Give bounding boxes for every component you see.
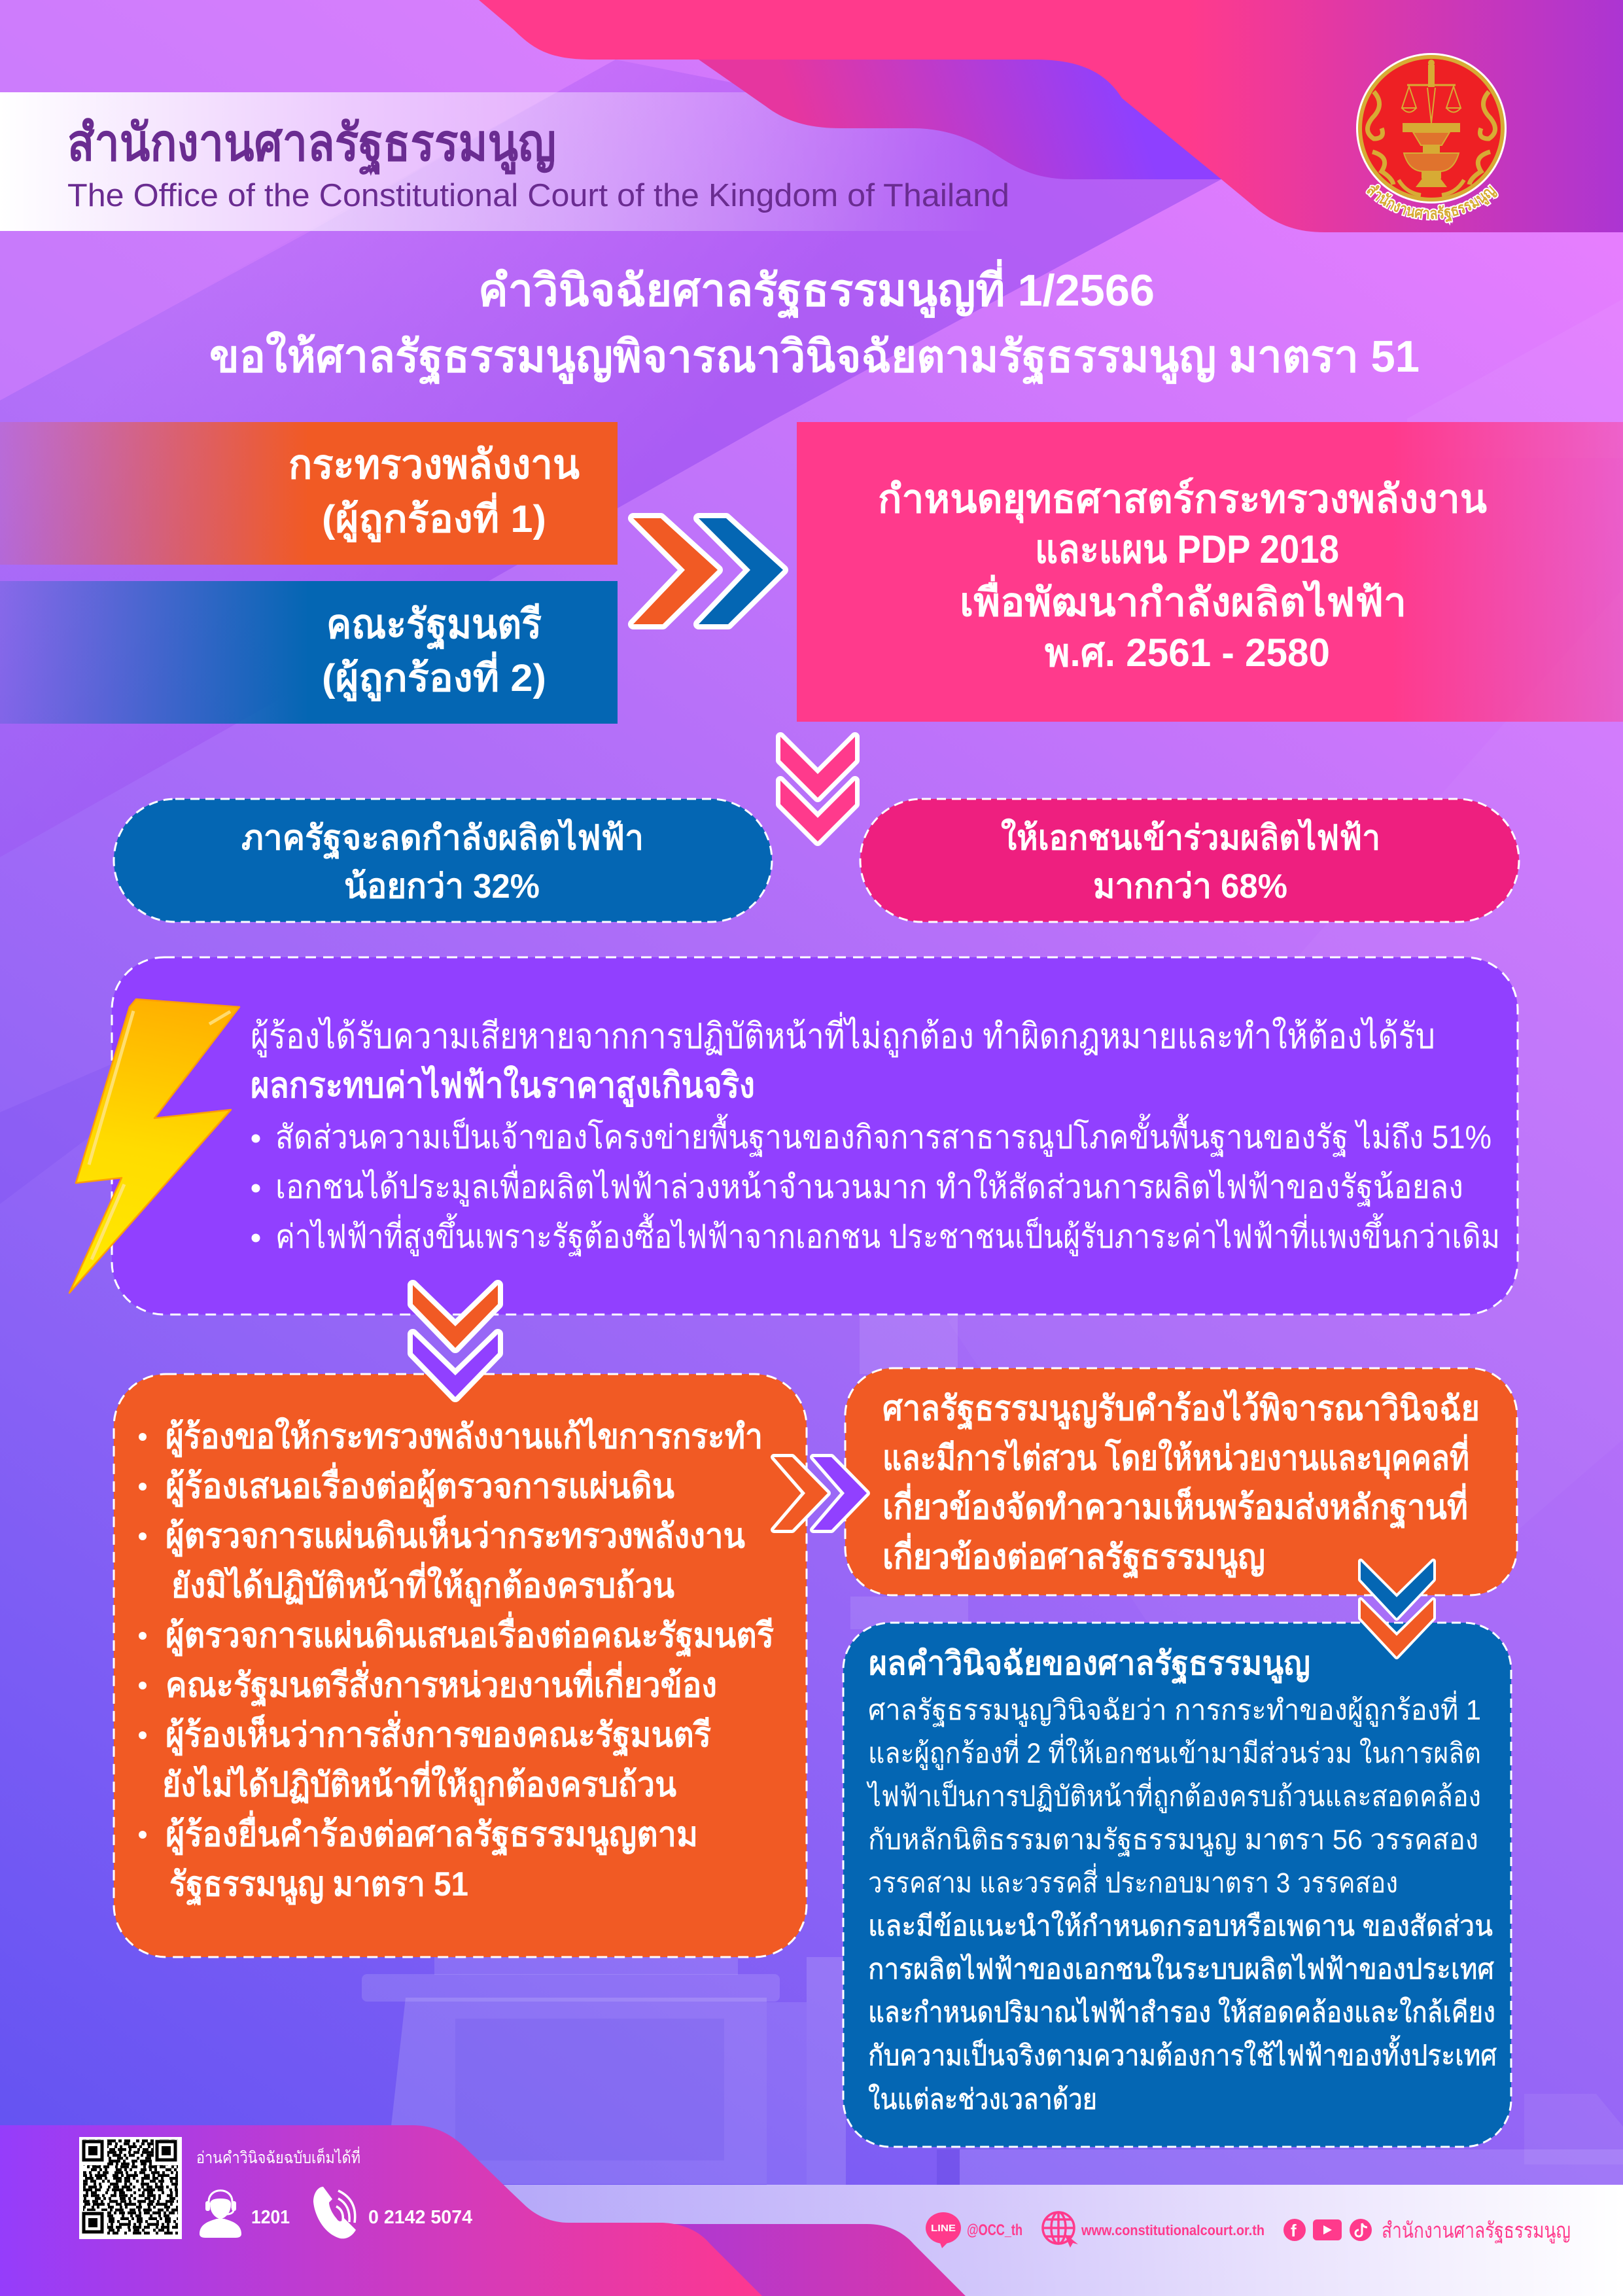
- footer shape: back: [589, 2224, 966, 2296]
- panel: court ruling: การผลิตไฟฟ้าของเอกชนในระบบผลิตไฟฟ้าของประเทศ: [868, 1953, 1494, 1985]
- pill: state under 32%: ภาครัฐจะลดกำลังผลิตไฟฟ้า: [241, 818, 644, 860]
- panel: petitioner damage: เอกชนได้ประมูลเพื่อผลิตไฟฟ้าล่วงหน้าจำนวนมาก ทำให้สัดส่วนการผลิตไฟฟ้าของรัฐน้อยลง: [275, 1165, 1463, 1207]
- panel: petitioner damage: สัดส่วนความเป็นเจ้าของโครงข่ายพื้นฐานของกิจการสาธารณูปโภคขั้นพื้นฐานของรัฐ ไม่ถึง 51%: [275, 1114, 1492, 1157]
- panel: court ruling: กับหลักนิติธรรมตามรัฐธรรมนูญ มาตรา 56 วรรคสอง: [868, 1824, 1478, 1857]
- panel: energy strategy: เพื่อพัฒนากำลังผลิตไฟฟ้า: [960, 574, 1406, 624]
- panel: petitioner actions: ผู้ร้องเสนอเรื่องต่อผู้ตรวจการแผ่นดิน: [166, 1462, 674, 1508]
- panel: court ruling: กับความเป็นจริงตามความต้องการใช้ไฟฟ้าของทั้งประเทศ: [868, 2035, 1497, 2072]
- panel: court accepts petition: ศาลรัฐธรรมนูญรับคำร้องไว้พิจารณาวินิจฉัย: [882, 1388, 1480, 1430]
- text: read full ruling: อ่านคำวินิจฉัยฉบับเต็มได้ที่: [196, 2146, 360, 2167]
- panel: respondent 2: [0, 581, 618, 724]
- arrow: small double chevron right between panels: [774, 1457, 867, 1530]
- panel: court accepts petition: เกี่ยวข้องจัดทำความเห็นพร้อมส่งหลักฐานที่: [882, 1483, 1468, 1529]
- main title: ขอให้ศาลรัฐธรรมนูญพิจารณาวินิจฉัยตามรัฐธรรมนูญ มาตรา 51: [209, 330, 1420, 385]
- pill: private over 68%: [860, 799, 1519, 922]
- icon: LINE: [926, 2212, 961, 2248]
- panel: court accepts petition: [845, 1368, 1517, 1595]
- panel: court accepts petition: เกี่ยวข้องต่อศาลรัฐธรรมนูญ: [882, 1533, 1265, 1579]
- panel: petitioner actions: ผู้ร้องยื่นคำร้องต่อศาลรัฐธรรมนูญตาม: [166, 1810, 698, 1856]
- text: website: www.constitutionalcourt.or.th: [1081, 2222, 1265, 2238]
- panel: respondent 1: [0, 422, 618, 565]
- pill: state under 32%: [114, 799, 772, 922]
- icon: phone: [313, 2187, 356, 2238]
- text: hotline 1201: 1201: [251, 2207, 290, 2228]
- header ribbon: back: [699, 60, 1243, 179]
- main title: [209, 258, 1420, 385]
- arrow: pink double chevron down: [780, 737, 855, 841]
- main title: คำวินิจฉัยศาลรัฐธรรมนูญที่ 1/2566: [478, 258, 1155, 319]
- panel: petitioner actions: [114, 1374, 807, 1957]
- panel: court ruling: และมีข้อแนะนำให้กำหนดกรอบหรือเพดาน ของสัดส่วน: [868, 1910, 1493, 1942]
- icon: facebook: f: [1291, 2221, 1297, 2240]
- arrow: small double chevron down over panels: [413, 1285, 498, 1397]
- panel: court ruling: ผลคำวินิจฉัยของศาลรัฐธรรมนูญ: [869, 1645, 1310, 1684]
- header title: The Office of the Constitutional Court of the Kingdom of Thailand: [67, 178, 1009, 213]
- icon: tiktok: [1350, 2219, 1372, 2241]
- panel: energy strategy: และแผน PDP 2018: [1035, 527, 1339, 571]
- text: social account: สำนักงานศาลรัฐธรรมนูญ: [1382, 2218, 1571, 2244]
- panel: energy strategy: [797, 422, 1623, 722]
- header ribbon: front: [479, 0, 1623, 232]
- icon: youtube: [1313, 2219, 1342, 2240]
- panel: petitioner actions: รัฐธรรมนูญ มาตรา 51: [169, 1865, 468, 1906]
- panel: court ruling: และกำหนดปริมาณไฟฟ้าสำรอง ให้สอดคล้องและใกล้เคียง: [868, 1996, 1495, 2028]
- panel: court accepts petition: และมีการไต่สวน โดยให้หน่วยงานและบุคคลที่: [882, 1434, 1469, 1479]
- panel: petitioner actions: ผู้ตรวจการแผ่นดินเสนอเรื่องต่อคณะรัฐมนตรี: [166, 1612, 774, 1657]
- panel: petitioner damage: ผู้ร้องได้รับความเสียหายจากการปฏิบัติหน้าที่ไม่ถูกต้อง ทำผิดกฎหมายและทำให้ต้องได้รับ: [251, 1012, 1435, 1057]
- pill: private over 68%: มากกว่า 68%: [1093, 868, 1287, 906]
- panel: court ruling: ในแต่ละช่วงเวลาด้วย: [868, 2083, 1097, 2115]
- panel: petitioner damage: [112, 957, 1518, 1315]
- pill: state under 32%: น้อยกว่า 32%: [344, 868, 540, 906]
- panel: petitioner actions: ผู้ร้องเห็นว่าการสั่งการของคณะรัฐมนตรี: [166, 1711, 711, 1757]
- header title: [67, 114, 1009, 213]
- panel: respondent 1: กระทรวงพลังงาน: [288, 442, 580, 487]
- header title: สำนักงานศาลรัฐธรรมนูญ: [67, 114, 556, 176]
- panel: court ruling: ศาลรัฐธรรมนูญวินิจฉัยว่า การกระทำของผู้ถูกร้องที่ 1: [868, 1691, 1481, 1727]
- text: LINE account: @OCC_th: [967, 2221, 1022, 2239]
- logo: constitutional court seal: สำนักงานศาลรัฐธรรมนูญ: [1365, 183, 1499, 226]
- panel: petitioner actions: คณะรัฐมนตรีสั่งการหน่วยงานที่เกี่ยวข้อง: [166, 1661, 717, 1707]
- icon: globe: [1043, 2212, 1078, 2248]
- footer shape: front: [0, 2125, 762, 2296]
- header band: [0, 92, 994, 231]
- panel: respondent 1: (ผู้ถูกร้องที่ 1): [322, 492, 546, 542]
- background courthouse silhouette: [362, 1315, 1623, 2185]
- icon: facebook: [1283, 2219, 1306, 2241]
- arrow: double chevron right: [633, 518, 783, 624]
- icon: lightning bolt: [69, 999, 239, 1293]
- panel: petitioner actions: ผู้ร้องขอให้กระทรวงพลังงานแก้ไขการกระทำ: [166, 1417, 763, 1458]
- footer band: [0, 2185, 1623, 2296]
- QR code: [79, 2137, 182, 2239]
- panel: court ruling: วรรคสาม และวรรคสี่ ประกอบมาตรา 3 วรรคสอง: [868, 1863, 1398, 1899]
- logo: constitutional court seal: [1356, 53, 1507, 226]
- panel: court ruling: [843, 1623, 1511, 2147]
- panel: court ruling: และผู้ถูกร้องที่ 2 ที่ให้เอกชนเข้ามามีส่วนร่วม ในการผลิต: [868, 1734, 1481, 1771]
- panel: energy strategy: พ.ศ. 2561 - 2580: [1045, 631, 1330, 675]
- text: phone number: 0 2142 5074: [368, 2207, 472, 2228]
- panel: petitioner actions: ยังมิได้ปฏิบัติหน้าที่ให้ถูกต้องครบถ้วน: [171, 1562, 674, 1607]
- panel: court ruling: ไฟฟ้าเป็นการปฏิบัติหน้าที่ถูกต้องครบถ้วนและสอดคล้อง: [866, 1777, 1481, 1814]
- panel: petitioner actions: ยังไม่ได้ปฏิบัติหน้าที่ให้ถูกต้องครบถ้วน: [162, 1761, 676, 1806]
- panel: respondent 2: (ผู้ถูกร้องที่ 2): [322, 651, 546, 701]
- panel: petitioner actions: ผู้ตรวจการแผ่นดินเห็นว่ากระทรวงพลังงาน: [166, 1515, 745, 1557]
- arrow: blue and orange chevron down: [1361, 1561, 1433, 1657]
- panel: respondent 2: คณะรัฐมนตรี: [326, 602, 542, 650]
- icon: LINE: LINE: [931, 2223, 956, 2234]
- icon: headset agent: [200, 2191, 241, 2238]
- panel: energy strategy: กำหนดยุทธศาสตร์กระทรวงพลังงาน: [878, 477, 1487, 523]
- panel: petitioner damage: ผลกระทบค่าไฟฟ้าในราคาสูงเกินจริง: [251, 1065, 755, 1107]
- panel: petitioner damage: ค่าไฟฟ้าที่สูงขึ้นเพราะรัฐต้องซื้อไฟฟ้าจากเอกชน ประชาชนเป็นผู้รับภาระค่าไฟฟ้าที่แพงขึ้นกว่าเดิม: [275, 1213, 1500, 1256]
- pill: private over 68%: ให้เอกชนเข้าร่วมผลิตไฟฟ้า: [1001, 818, 1380, 857]
